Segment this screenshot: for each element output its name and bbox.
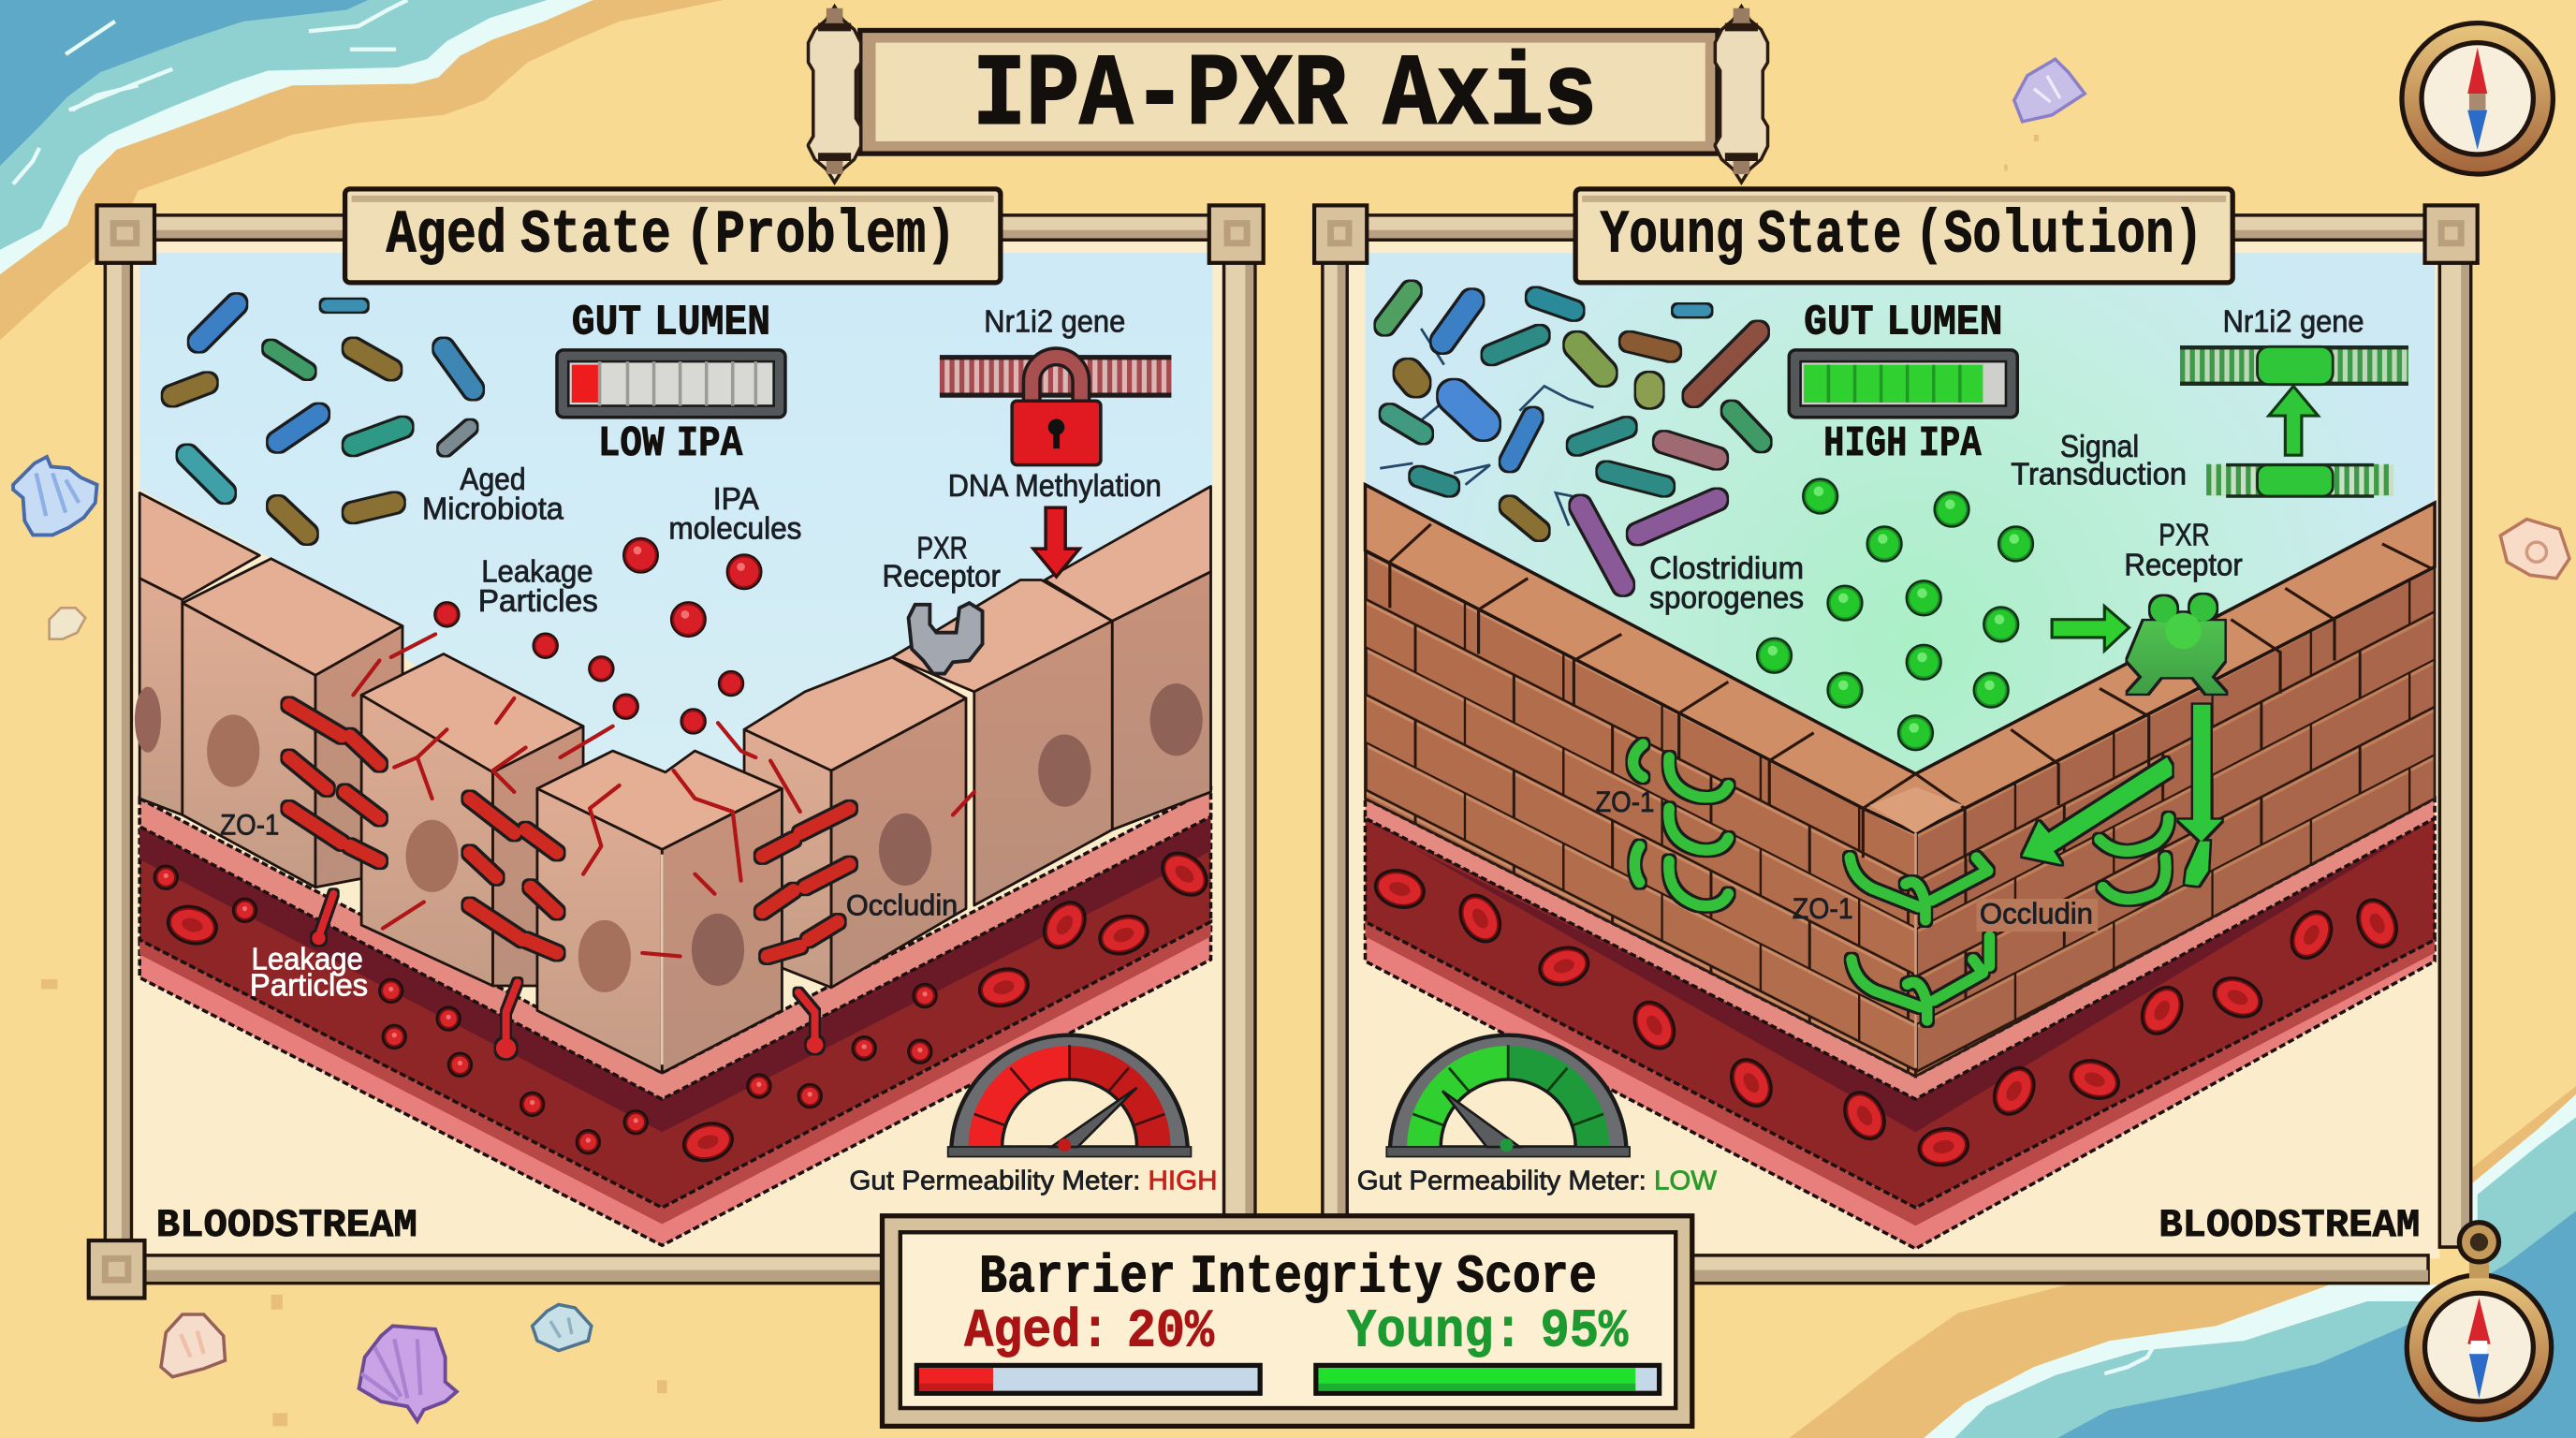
score title: Barrier Integrity Score (979, 1247, 1597, 1308)
panel: aged state (131, 240, 1224, 1258)
signal transduction label: Signal (2060, 430, 2139, 464)
cell right 2 (892, 580, 1112, 905)
brick wall right face (1915, 566, 2435, 1077)
scroll roller left (809, 7, 861, 183)
gauge label: Gut Permeability Meter: LOW (1357, 1167, 1718, 1196)
frame: aged panel (89, 205, 1264, 1298)
arrow: signal to junctions (2023, 757, 2172, 864)
cell 3 (361, 654, 583, 986)
gut lumen green sky (1365, 253, 2435, 774)
signal transduction label (2011, 430, 2187, 492)
panel background (1347, 240, 2439, 1258)
young heading plate (1575, 189, 2232, 283)
icon: blue shell (13, 457, 97, 535)
title: IPA-PXR Axis (973, 38, 1597, 154)
bloodstream layers (139, 788, 1211, 1245)
central cell (537, 751, 782, 1073)
arrow: up to gene (2269, 386, 2318, 455)
icon: lavender shell (2014, 59, 2085, 122)
cell 2 (183, 559, 402, 888)
PXR receptor label: Receptor (882, 560, 1001, 594)
gauge label: Gut Permeability Meter: HIGH (849, 1167, 1218, 1196)
aged heading plate (345, 189, 1001, 283)
icon: purple shell (359, 1326, 457, 1421)
microbiota label: Microbiota (422, 492, 564, 527)
epithelial cells (135, 486, 1211, 1073)
icon: active PXR receptor (2128, 594, 2226, 694)
gut lumen label: GUT LUMEN (572, 298, 770, 346)
clostridium label: Clostridium (1649, 551, 1804, 586)
red blood cells (1371, 865, 2404, 1169)
top-left ocean (0, 0, 723, 340)
young heading: Young State (Solution) (1600, 202, 2203, 271)
leakage label upper (478, 554, 598, 619)
ZO-1 and occludin broken strands (289, 705, 849, 956)
young score: Young: 95% (1347, 1301, 1629, 1362)
microbiota label: Aged (460, 462, 526, 497)
leakage label lower (250, 942, 368, 1004)
aged heading: Aged State (Problem) (386, 202, 956, 271)
icon: receptor gene lower (2206, 465, 2393, 496)
gut lumen sky (139, 253, 1212, 822)
DNA methylation label: DNA Methylation (948, 469, 1162, 504)
icon: compass top right (2402, 23, 2553, 174)
brick wall crest (1365, 485, 2435, 1068)
IPA molecules label: molecules (668, 512, 801, 547)
cell right 3 (1045, 486, 1211, 829)
clostridium label (1649, 551, 1804, 615)
IPA molecules label (668, 482, 801, 547)
clostridium label: sporogenes (1649, 580, 1804, 615)
corner blocks (89, 205, 1264, 1298)
healthy microbiota bacteria (1385, 291, 1761, 585)
icon: flagella (1380, 329, 1593, 526)
aged score: Aged: 20% (964, 1301, 1214, 1362)
ZO-1 label: ZO-1 (220, 808, 279, 842)
icon: active gene (2180, 346, 2408, 385)
leakage label upper: Leakage (481, 554, 593, 589)
bloodstream layers (1365, 799, 2435, 1249)
ZO-1 label lower: ZO-1 (1793, 891, 1853, 925)
icon: inactive PXR receptor (909, 603, 983, 674)
PXR receptor label: PXR (2159, 519, 2210, 553)
IPA molecules (434, 538, 761, 734)
IPA level bar (557, 350, 785, 418)
ZO-1 label upper: ZO-1 (1595, 785, 1654, 818)
cell 1 (135, 493, 259, 814)
gut lumen label: GUT LUMEN (1804, 298, 2002, 346)
leakage label upper: Particles (478, 584, 598, 619)
leakage label lower: Leakage (252, 942, 363, 976)
icon: blue shell bottom (533, 1304, 592, 1351)
icon: methylated gene (940, 357, 1171, 465)
icon: cream shell (50, 608, 85, 639)
panel background (131, 240, 1224, 1258)
low IPA label: LOW IPA (598, 419, 743, 468)
aged score bar (916, 1365, 1260, 1393)
scroll roller right (1715, 7, 1767, 183)
corner blocks (1314, 205, 2478, 263)
icon: pink shell bottom (161, 1314, 225, 1377)
cell right 1 (744, 657, 966, 988)
IPA level bar (1789, 350, 2017, 418)
bloodstream label: BLOODSTREAM (2159, 1203, 2420, 1248)
arrow: IPA to receptor (2052, 607, 2130, 651)
signal transduction label: Transduction (2011, 458, 2187, 492)
Nr1i2 gene label: Nr1i2 gene (2223, 305, 2364, 340)
frame: young panel (1314, 205, 2478, 1284)
PXR receptor label (2124, 519, 2243, 582)
icon: compass bottom right (2407, 1275, 2552, 1419)
bloodstream label: BLOODSTREAM (156, 1203, 417, 1248)
panel: young state (1347, 240, 2439, 1258)
icon: pink shell (2500, 520, 2569, 579)
leakage label lower: Particles (250, 969, 368, 1004)
sand specks (41, 135, 2039, 1426)
score panel (882, 1216, 1692, 1426)
microbiota label (422, 462, 564, 527)
red blood cells (154, 844, 1215, 1166)
Nr1i2 gene label: Nr1i2 gene (984, 305, 1125, 340)
occludin label: Occludin (1980, 896, 2093, 930)
permeability gauge high (948, 1035, 1191, 1157)
IPA molecules (1757, 479, 2033, 750)
brick wall left face (1365, 550, 1915, 1077)
PXR receptor label: PXR (916, 532, 968, 566)
tight junction chains (1633, 744, 2169, 1020)
arrow: signal down (2178, 705, 2222, 886)
cracks (353, 634, 974, 956)
aged microbiota bacteria (172, 304, 473, 534)
arrow: methylation down (1033, 507, 1079, 577)
bottom-right ocean (1788, 986, 2576, 1438)
PXR receptor label (882, 532, 1001, 594)
PXR receptor label: Receptor (2124, 548, 2243, 582)
high IPA label: HIGH IPA (1823, 419, 1982, 468)
leakage streams (312, 894, 823, 1058)
title scroll banner (809, 7, 1767, 183)
young score bar (1316, 1365, 1660, 1393)
icon: compass ornament (2459, 1223, 2499, 1278)
occludin label: Occludin (846, 888, 958, 922)
IPA molecules label: IPA (713, 482, 760, 517)
permeability gauge low (1386, 1035, 1630, 1157)
